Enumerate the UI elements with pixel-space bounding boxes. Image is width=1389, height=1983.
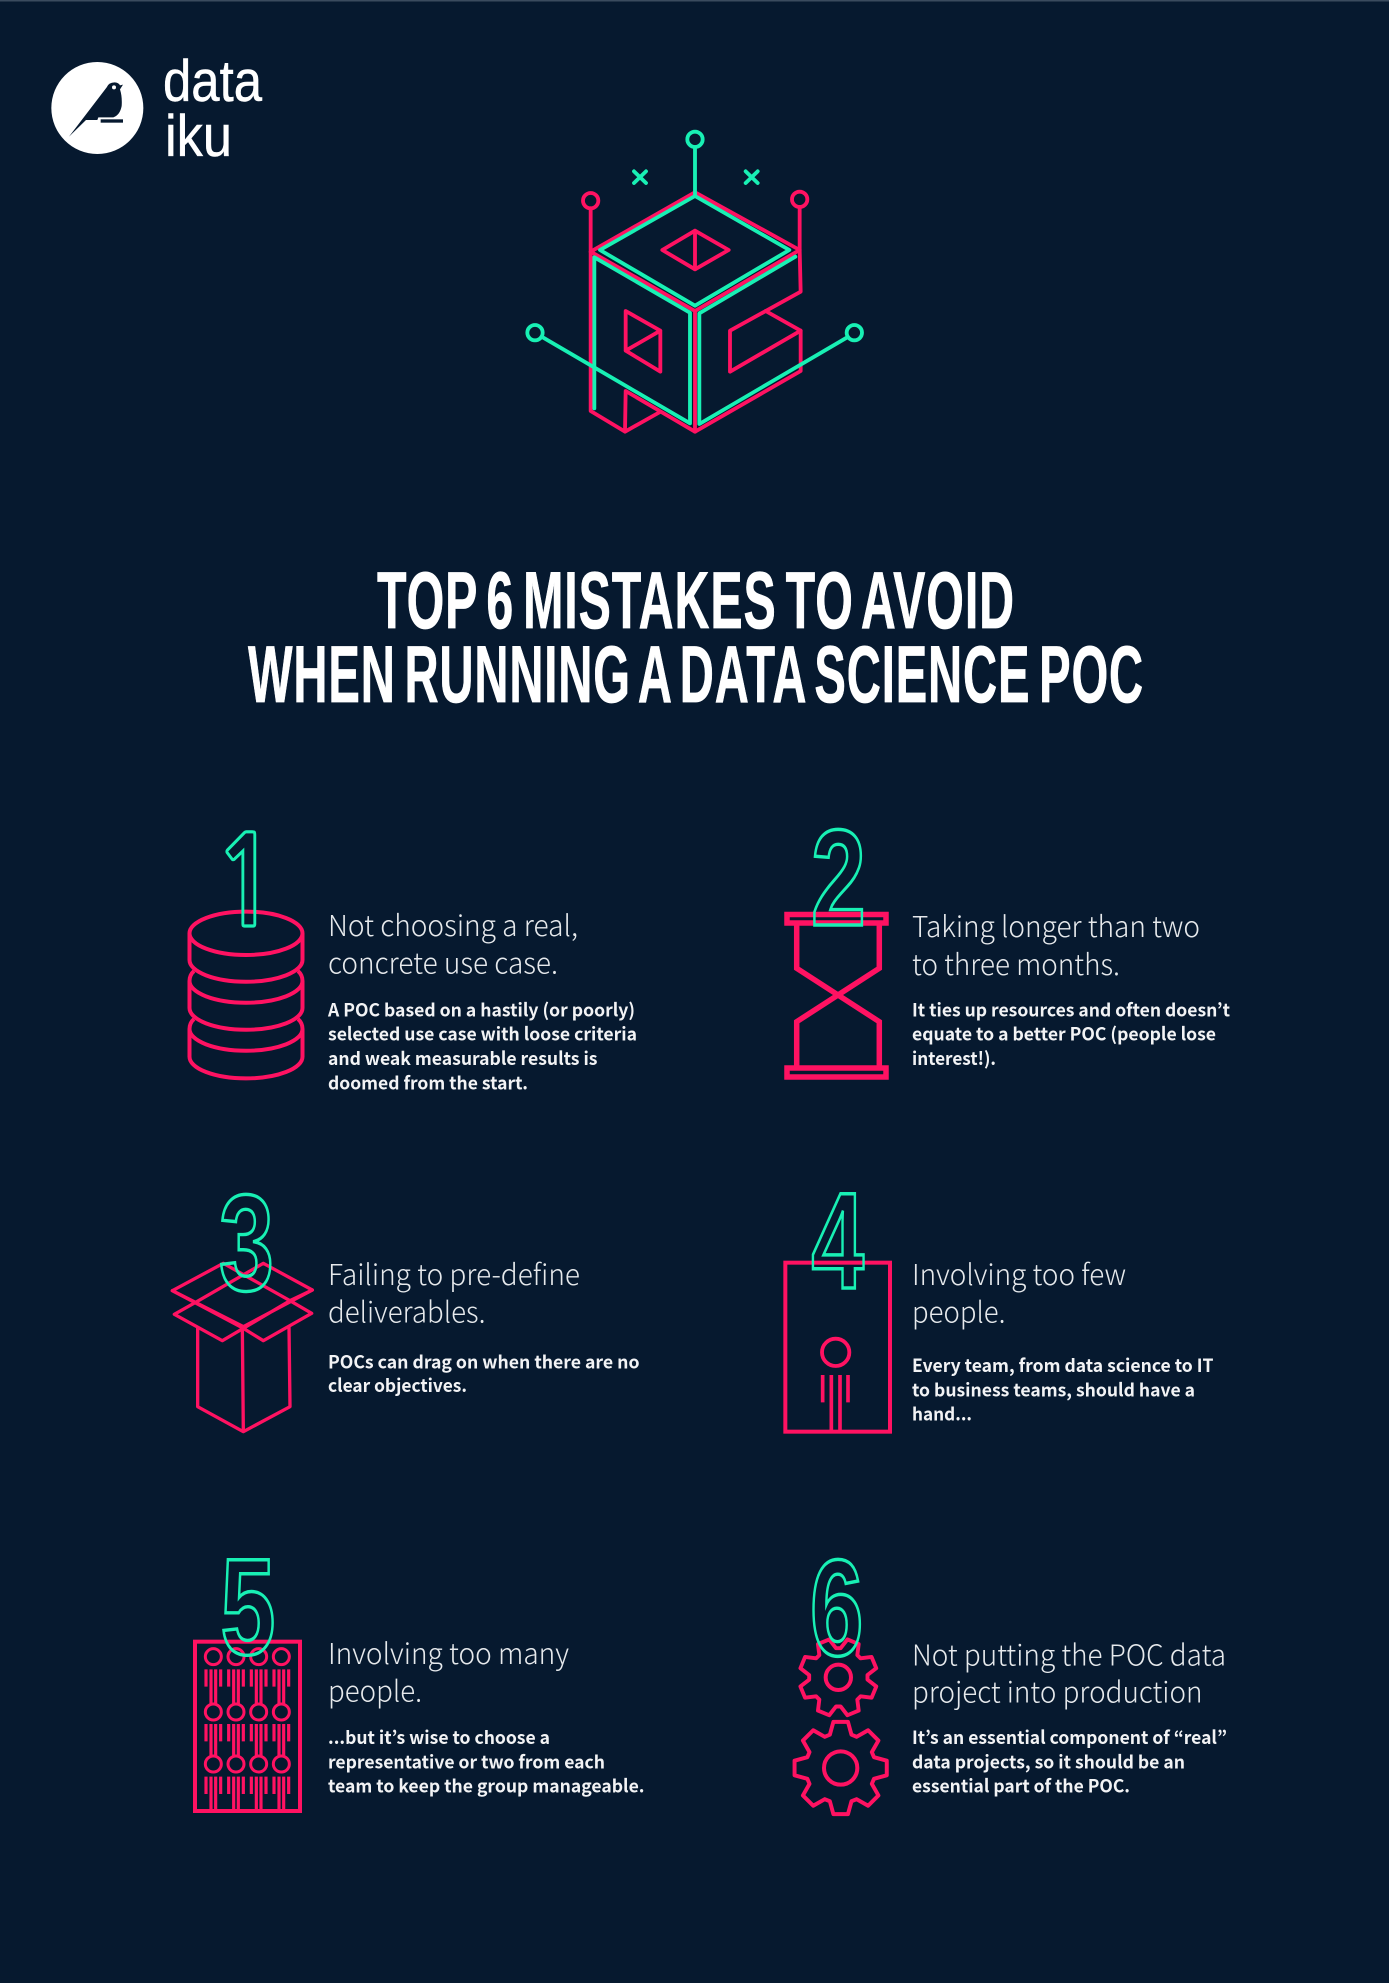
icon: hourglass xyxy=(787,914,886,1077)
icon: crowd of people in a box xyxy=(195,1642,300,1811)
icon: bird in circle xyxy=(51,62,143,154)
panel: mistake 2 xyxy=(787,802,1230,1077)
hero icon: POC isometric cube xyxy=(527,132,862,432)
heading 4: people. xyxy=(912,1290,1006,1332)
heading 4: Involving too few xyxy=(912,1252,1126,1294)
icon: database stack xyxy=(190,912,302,1078)
number 4: 4 xyxy=(812,1163,864,1317)
panel: mistake 4 xyxy=(785,1163,1214,1432)
description 3 xyxy=(328,1348,640,1398)
panel: mistake 1 xyxy=(190,821,637,1095)
description 1: doomed from the start. xyxy=(328,1069,528,1095)
heading 3: deliverables. xyxy=(328,1290,486,1332)
description 6: essential part of the POC. xyxy=(912,1773,1130,1799)
heading 3 xyxy=(328,1252,580,1332)
heading 1: concrete use case. xyxy=(328,940,558,982)
logo: dataiku xyxy=(51,49,263,169)
panel: mistake 5 xyxy=(195,1531,644,1811)
number 1: 1 xyxy=(212,821,280,944)
description 5: representative or two from each xyxy=(328,1748,605,1774)
description 2 xyxy=(912,997,1230,1071)
heading 5 xyxy=(328,1631,569,1711)
panel: mistake 3 xyxy=(172,1167,640,1432)
description 4: to business teams, should have a xyxy=(912,1376,1195,1402)
description 6: It’s an essential component of “real” xyxy=(912,1724,1227,1750)
number 3: 3 xyxy=(219,1167,274,1320)
description 3: clear objectives. xyxy=(328,1372,467,1398)
panel: mistake 6 xyxy=(788,1532,1227,1814)
heading 5: people. xyxy=(328,1669,422,1711)
logo wordmark xyxy=(163,49,263,169)
description 5 xyxy=(328,1724,644,1799)
description 2: interest!). xyxy=(912,1045,996,1071)
number 2: 2 xyxy=(811,802,866,955)
icon: open box xyxy=(172,1263,312,1432)
title xyxy=(248,556,1144,720)
heading 1 xyxy=(328,903,578,982)
description 1: A POC based on a hastily (or poorly) xyxy=(327,997,635,1023)
logo wordmark: iku xyxy=(165,104,232,169)
description 4: Every team, from data science to IT xyxy=(912,1352,1214,1378)
description 1: and weak measurable results is xyxy=(328,1045,598,1071)
description 6 xyxy=(912,1724,1227,1799)
logo wordmark: data xyxy=(163,49,263,114)
heading 3: Failing to pre-define xyxy=(328,1252,580,1294)
heading 5: Involving too many xyxy=(328,1631,569,1673)
description 5: ...but it’s wise to choose a xyxy=(328,1724,550,1750)
icon: person in a box xyxy=(785,1263,890,1432)
description 1 xyxy=(327,997,637,1095)
number 5: 5 xyxy=(220,1531,275,1684)
heading 6: project into production xyxy=(912,1670,1202,1712)
heading 2: to three months. xyxy=(912,942,1120,984)
number 6: 6 xyxy=(810,1532,863,1685)
description 4 xyxy=(912,1352,1214,1427)
heading 6 xyxy=(912,1633,1226,1712)
description 6: data projects, so it should be an xyxy=(912,1748,1185,1774)
heading 6: Not putting the POC data xyxy=(912,1633,1226,1675)
heading 4 xyxy=(912,1252,1126,1332)
description 2: equate to a better POC (people lose xyxy=(912,1021,1216,1047)
heading 2: Taking longer than two xyxy=(912,904,1200,946)
description 1: selected use case with loose criteria xyxy=(328,1021,637,1047)
description 4: hand... xyxy=(912,1401,972,1427)
description 3: POCs can drag on when there are no xyxy=(328,1348,640,1374)
heading 1: Not choosing a real, xyxy=(328,903,578,945)
icon: two gears xyxy=(788,1627,889,1814)
description 2: It ties up resources and often doesn’t xyxy=(912,997,1230,1023)
description 5: team to keep the group manageable. xyxy=(328,1773,644,1799)
heading 2 xyxy=(912,904,1200,984)
